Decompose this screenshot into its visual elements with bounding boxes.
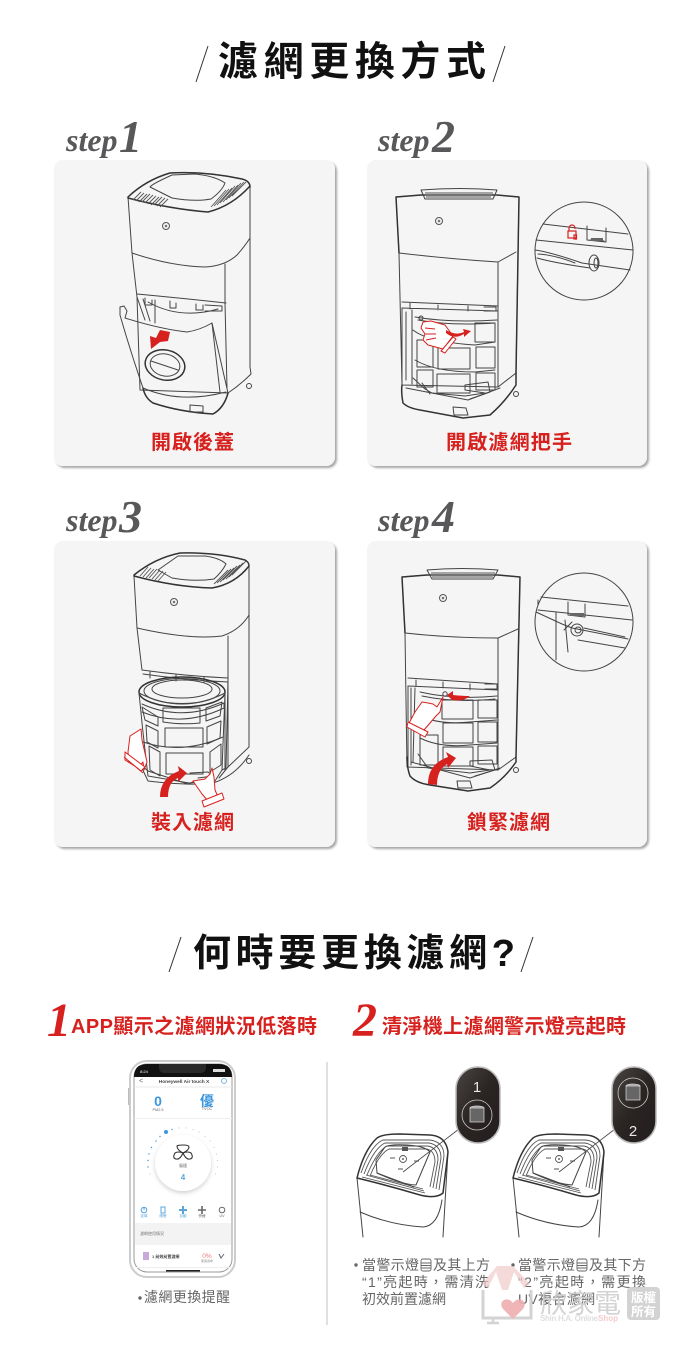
icon: right hand bbox=[193, 768, 218, 802]
note: warning light 1: 當警示燈 bbox=[362, 1257, 419, 1273]
step 1 label: 1 bbox=[119, 111, 142, 162]
watermark: Shop bbox=[598, 1314, 618, 1323]
caption: open rear cover: 開啟後蓋 bbox=[151, 431, 234, 454]
copyright badge: 所有 bbox=[631, 1304, 656, 1319]
note: warning light 1: “1”亮起時，需清洗 bbox=[362, 1274, 489, 1290]
caption: open filter handle: 開啟濾網把手 bbox=[446, 431, 572, 454]
caption: filter reminder: 濾網更換提醒 bbox=[144, 1289, 230, 1305]
dial bbox=[147, 1127, 218, 1191]
phone app screenshot: TVOC bbox=[202, 1107, 213, 1111]
step 2 card bbox=[367, 160, 647, 466]
copyright badge: 版權 bbox=[631, 1290, 656, 1305]
heading 1: app filter status low bbox=[47, 994, 317, 1047]
panel: step 2 bbox=[367, 111, 647, 466]
icon: red lock bbox=[568, 225, 576, 239]
icon: red curved arrow bbox=[446, 329, 471, 337]
control icons bbox=[141, 1206, 225, 1214]
heading 2: warning light on: 2 bbox=[352, 994, 377, 1047]
watermark: Shin H.A. Online bbox=[540, 1314, 599, 1323]
filter status row bbox=[143, 1252, 224, 1263]
illustration: purifier with warning light 1 bbox=[357, 1067, 500, 1237]
step 3 label: step bbox=[65, 502, 118, 538]
callout pill 1 bbox=[403, 1067, 500, 1172]
icon: red curved arrow bbox=[160, 766, 187, 797]
note: warning light 2: 及其下方 bbox=[589, 1257, 646, 1273]
copyright badge bbox=[627, 1287, 660, 1320]
phone app screenshot: 優 bbox=[200, 1093, 214, 1109]
step 2 label bbox=[377, 111, 455, 162]
watermark logo bbox=[482, 1266, 531, 1324]
note: warning light 1: 初效前置濾網 bbox=[362, 1291, 446, 1307]
phone app screenshot: 快速 bbox=[198, 1213, 206, 1218]
note: warning light 2 bbox=[511, 1257, 646, 1307]
callout pill 1: 1 bbox=[473, 1079, 481, 1096]
filter status row: 使用壽命 bbox=[201, 1258, 213, 1263]
phone app screenshot: PM2.5 bbox=[153, 1108, 163, 1112]
phone app screenshot: 濾網使用情況 bbox=[140, 1230, 164, 1236]
icon: hand on filter handle bbox=[421, 321, 456, 353]
callout pill 2: 2 bbox=[629, 1123, 637, 1140]
step 4 label: 4 bbox=[431, 491, 455, 542]
filter status row: 1 前效前置濾網 bbox=[152, 1253, 179, 1259]
icon: small red arrow bbox=[447, 691, 470, 700]
heading 1: app filter status low: APP顯示之濾網狀況低落時 bbox=[71, 1014, 317, 1038]
step 1 label: step bbox=[65, 122, 118, 158]
illustration: purifier with warning light 2 bbox=[513, 1067, 656, 1237]
illustration: purifier with rear cover opened bbox=[120, 173, 252, 414]
step 1 label bbox=[65, 111, 142, 162]
vertical divider bbox=[326, 1062, 328, 1325]
icon: pointing hand bbox=[408, 697, 443, 732]
note: warning light 1 bbox=[354, 1257, 490, 1307]
phone app screenshot: 0 bbox=[154, 1093, 162, 1109]
phone app screenshot: < bbox=[139, 1078, 143, 1085]
title: filter replacement method: 濾網更換方式 bbox=[218, 40, 486, 84]
note: warning light 1: 及其上方 bbox=[433, 1257, 490, 1273]
callout pill 2 bbox=[559, 1067, 656, 1172]
step 2 label: step bbox=[377, 122, 430, 158]
heading 1: app filter status low: 1 bbox=[47, 994, 71, 1047]
icon: big red curved arrow bbox=[428, 752, 456, 785]
phone app screenshot: 睡眠 bbox=[159, 1213, 167, 1218]
caption: install filter: 裝入濾網 bbox=[151, 811, 234, 834]
inset: handle close-up bbox=[535, 202, 633, 300]
illustration: locking filter bbox=[402, 568, 633, 791]
illustration: inserting filter bbox=[124, 553, 252, 807]
note: warning light 2: UV複合濾網 bbox=[518, 1291, 595, 1307]
phone app screenshot: Honeywell Air touch X bbox=[159, 1079, 210, 1085]
watermark bbox=[482, 1266, 660, 1324]
step 4 card bbox=[367, 541, 647, 847]
phone app screenshot: UV bbox=[220, 1214, 225, 1218]
icon: small filter bbox=[577, 1259, 587, 1271]
step 4 label bbox=[377, 491, 455, 542]
dial: 4 bbox=[181, 1173, 186, 1182]
heading 2: warning light on: 清淨機上濾網警示燈亮起時 bbox=[382, 1014, 626, 1038]
watermark: 欣家電 bbox=[540, 1289, 621, 1319]
phone app screenshot: 自動 bbox=[179, 1213, 187, 1218]
icon: small filter bbox=[421, 1259, 431, 1271]
icon: fan bbox=[174, 1145, 192, 1159]
note: warning light 2: 當警示燈 bbox=[518, 1257, 575, 1273]
step 2 label: 2 bbox=[431, 111, 455, 162]
step 3 card bbox=[54, 541, 335, 847]
icon: left hand bbox=[125, 729, 147, 770]
panel: step 1 bbox=[54, 111, 335, 466]
filter status row: 0% bbox=[202, 1253, 212, 1260]
panel: step 3 bbox=[54, 491, 335, 847]
icon: filter bbox=[626, 1084, 640, 1100]
caption: lock filter: 鎖緊濾網 bbox=[467, 811, 550, 834]
panel: step 4 bbox=[367, 491, 647, 847]
step 3 label bbox=[65, 491, 142, 542]
dial: 風速 bbox=[179, 1162, 187, 1168]
phone app screenshot: 定時 bbox=[140, 1213, 148, 1218]
note: warning light 2: “2”亮起時，需更換 bbox=[518, 1274, 646, 1290]
step 3 label: 3 bbox=[118, 491, 142, 542]
step 1 card bbox=[54, 160, 335, 466]
icon: red down-left arrow bbox=[150, 330, 170, 349]
icon: filter bbox=[470, 1106, 484, 1122]
inset: locked handle close-up bbox=[535, 573, 633, 671]
phone app screenshot: 8:24 bbox=[140, 1069, 149, 1074]
heading 2: warning light on bbox=[352, 994, 626, 1047]
heading: when to replace filter: 何時要更換濾網? bbox=[193, 933, 515, 975]
phone app screenshot bbox=[128, 1061, 235, 1277]
illustration: purifier with filter handle bbox=[396, 188, 633, 418]
step 4 label: step bbox=[377, 502, 430, 538]
